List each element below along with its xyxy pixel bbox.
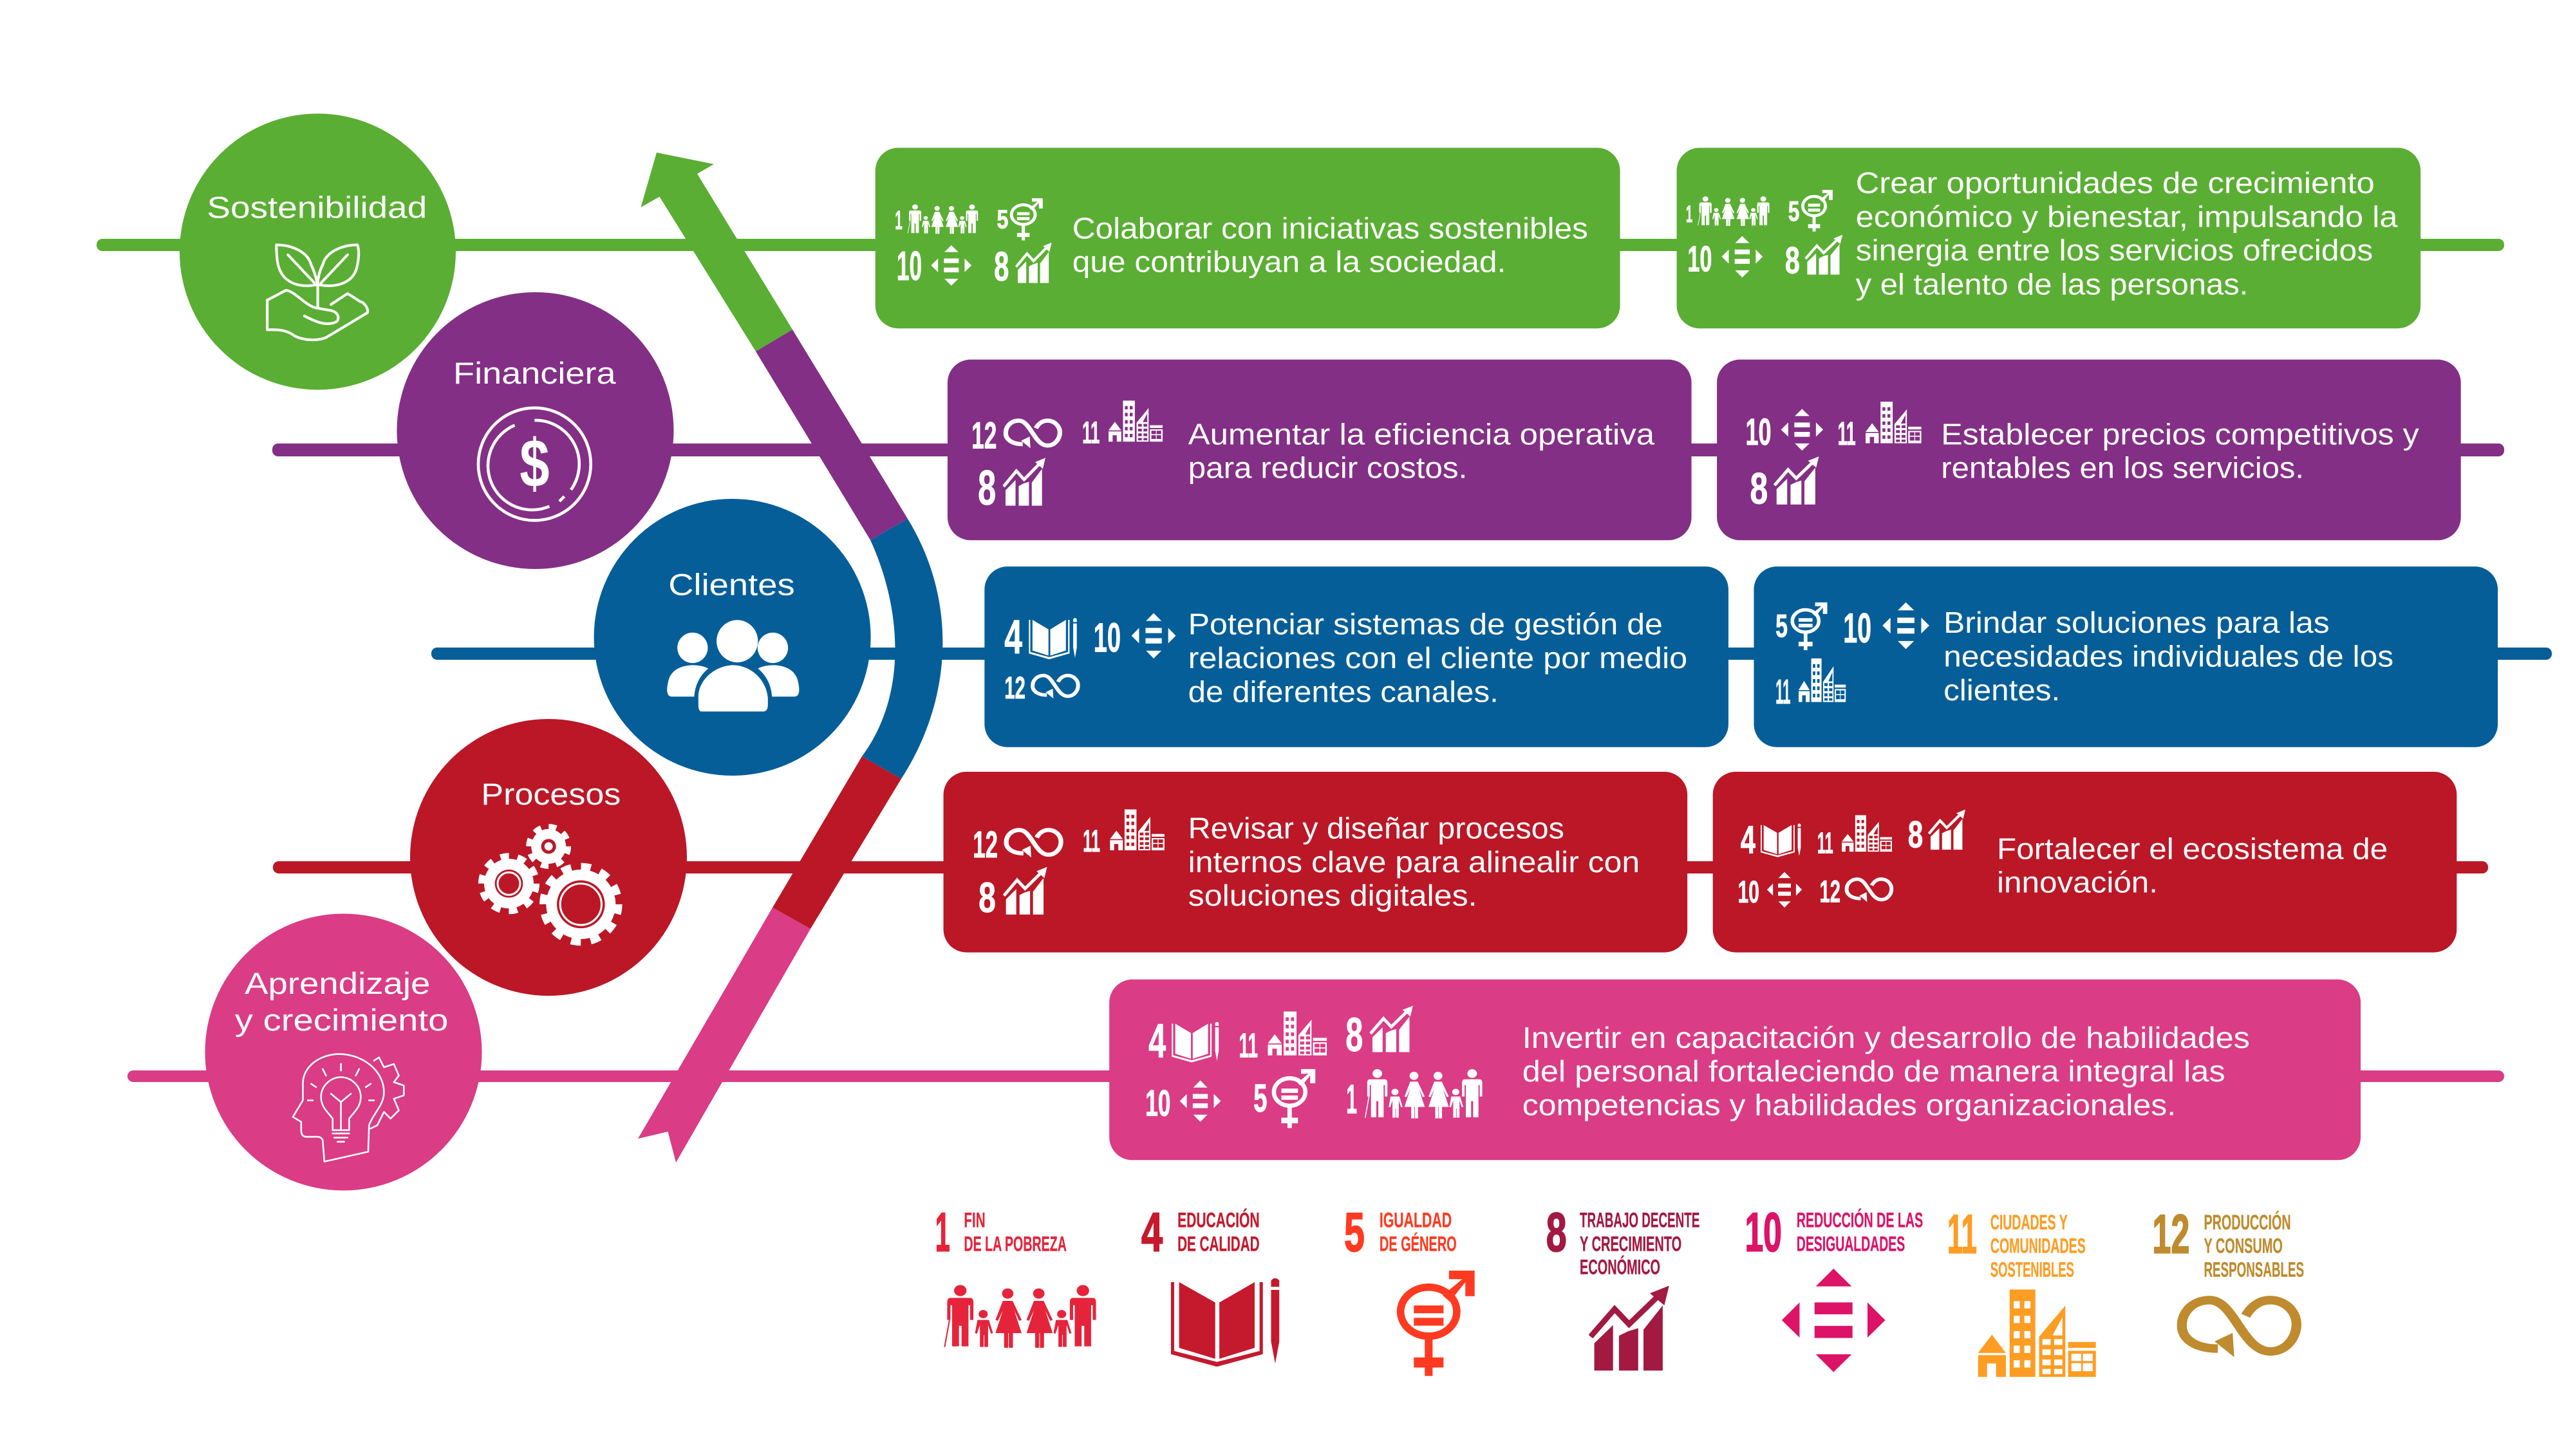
sdg icons group: 1 (1686, 201, 1692, 227)
circle label: Aprendizaje y crecimiento: Aprendizaje (245, 967, 430, 1001)
panel text: para reducir costos. (1188, 451, 1467, 485)
legend: SDG 8 (1546, 1202, 1700, 1370)
panel: sostenibilidad 2 (1677, 148, 2420, 328)
sdg icons group: 10 (1737, 875, 1759, 910)
sdg icons group (1145, 1005, 1483, 1128)
panel: financiera 1 (948, 360, 1692, 540)
sdg icons group: 10 (897, 243, 922, 289)
icon: people group (667, 620, 799, 711)
circle: Sostenibilidad (180, 113, 456, 390)
panel text: Invertir en capacitación y desarrollo de habilidades (1522, 1021, 2250, 1054)
legend: SDG 10: 10 (1745, 1202, 1782, 1263)
panel text (1856, 166, 2398, 301)
horizontal line: Sostenibilidad (97, 239, 2504, 251)
sdg icons group (1686, 190, 1842, 281)
legend: SDG 11 (1947, 1204, 2096, 1377)
panel text (1522, 1021, 2250, 1121)
panel: procesos 2 (1713, 772, 2457, 953)
icon: plant in hand (267, 245, 368, 340)
sdg icons group: 8 (979, 874, 996, 922)
icon: dollar coin: $ (520, 426, 549, 501)
sdg icons group: 8 (1750, 464, 1768, 514)
sdg icons group: 8 (1908, 814, 1923, 855)
legend: SDG 5: IGUALDAD (1380, 1208, 1452, 1232)
legend: SDG 5 (1344, 1202, 1475, 1376)
panel text: Crear oportunidades de crecimiento (1856, 166, 2375, 200)
panel text (1072, 212, 1588, 278)
circle label: Aprendizaje y crecimiento (235, 967, 448, 1038)
horizontal line: Aprendizaje (127, 1070, 2504, 1082)
legend: SDG 11: COMUNIDADES (1990, 1233, 2086, 1257)
sdg icons group: 10 (1145, 1083, 1170, 1124)
circle: Aprendizaje y crecimiento (205, 914, 482, 1191)
panel text: Colaborar con iniciativas sostenibles (1072, 212, 1588, 245)
circle label: Aprendizaje y crecimiento: y crecimiento (235, 1003, 448, 1038)
panel text: que contribuyan a la sociedad. (1072, 245, 1506, 278)
sdg icons group (1745, 402, 1922, 514)
panel text: Fortalecer el ecosistema de (1997, 832, 2388, 866)
panel text: competencias y habilidades organizacionales. (1522, 1088, 2176, 1121)
panel text: económico y bienestar, impulsando la (1856, 200, 2398, 234)
panel: clientes 1 (984, 566, 1728, 747)
legend: SDG 5: 5 (1344, 1202, 1365, 1263)
sdg icons group: 8 (1785, 239, 1800, 281)
legend: SDG 5: DE GÉNERO (1380, 1231, 1457, 1255)
sdg icons group: 11 (1838, 415, 1856, 452)
panel text: del personal fortaleciendo de manera integral las (1522, 1054, 2225, 1088)
arrow: strategic progression, multicolour (638, 153, 942, 1162)
panel text: rentables en los servicios. (1941, 451, 2304, 485)
sdg icons group: 5 (1788, 196, 1799, 227)
panel text: Brindar soluciones para las (1943, 606, 2330, 639)
legend: SDG 11: SOSTENIBLES (1990, 1258, 2074, 1282)
panel text: relaciones con el cliente por medio (1188, 641, 1687, 675)
icon: dollar coin (478, 408, 591, 520)
legend: SDG 12 (2152, 1204, 2304, 1357)
horizontal line: Procesos (273, 861, 2488, 873)
sdg icons group: 5 (1253, 1076, 1268, 1120)
panel text: Revisar y diseñar procesos (1188, 812, 1564, 845)
sdg icons group: 11 (1083, 824, 1100, 859)
legend: SDG 12: RESPONSABLES (2204, 1258, 2304, 1282)
legend: SDG 11: 11 (1947, 1204, 1977, 1265)
circle label: Sostenibilidad: Sostenibilidad (207, 191, 427, 225)
sdg icons group (971, 400, 1163, 516)
legend: SDG 4: EDUCACIÓN (1177, 1208, 1260, 1232)
sdg icons group (1737, 810, 1965, 910)
panel text (1188, 608, 1687, 709)
sdg icons group: 11 (1239, 1027, 1258, 1065)
sdg icons group: 10 (1687, 239, 1712, 279)
legend: SDG 8: Y CRECIMIENTO (1580, 1231, 1681, 1255)
icon: head with lightbulb and gear (293, 1054, 404, 1162)
legend: SDG 12: PRODUCCIÓN (2204, 1210, 2291, 1234)
legend: SDG 8: 8 (1546, 1202, 1567, 1263)
panel: procesos 1 (944, 772, 1687, 953)
panel text: innovación. (1997, 866, 2158, 899)
panel: clientes 2 (1754, 566, 2498, 747)
panel text: Potenciar sistemas de gestión de (1188, 608, 1663, 641)
sdg icons group: 1 (895, 205, 903, 235)
legend: SDG 10: DESIGUALDADES (1797, 1231, 1905, 1255)
legend: SDG 1 (935, 1202, 1096, 1348)
panel text: de diferentes canales. (1188, 675, 1499, 709)
sdg icons group: 4 (1148, 1014, 1166, 1068)
legend: SDG 1: DE LA POBREZA (964, 1231, 1067, 1255)
circle: Clientes (594, 499, 871, 776)
panel text (1997, 832, 2388, 899)
horizontal line: Clientes (431, 648, 2552, 660)
panel text: internos clave para alinealir con (1188, 845, 1640, 879)
legend: SDG 1: 1 (935, 1202, 950, 1263)
legend: SDG 4: 4 (1141, 1202, 1163, 1263)
sdg icons group (973, 809, 1165, 922)
sdg icons group: 12 (1820, 874, 1840, 909)
sdg icons group: 4 (1004, 610, 1022, 664)
sdg icons group: 1 (1346, 1076, 1357, 1122)
legend: SDG 4: DE CALIDAD (1177, 1231, 1260, 1255)
panel text: Establecer precios competitivos y (1941, 417, 2419, 451)
legend: SDG 8: ECONÓMICO (1580, 1255, 1660, 1279)
sdg icons group: 12 (973, 824, 998, 866)
panel: financiera 2 (1717, 360, 2461, 540)
sdg icons group (1775, 602, 1929, 711)
panel text: necesidades individuales de los (1943, 640, 2393, 673)
horizontal line: Financiera (272, 443, 2504, 456)
circle: Procesos (410, 719, 687, 996)
sdg icons group: 10 (1094, 615, 1121, 661)
sdg icons group: 10 (1745, 411, 1772, 453)
sdg icons group (895, 198, 1052, 290)
sdg icons group (1004, 610, 1176, 705)
legend: SDG 1: FIN (964, 1208, 986, 1232)
circle: Financiera (397, 292, 673, 569)
circle label: Financiera: Financiera (453, 357, 616, 391)
sdg icons group: 11 (1082, 416, 1100, 451)
circle label: Procesos: Procesos (481, 778, 621, 812)
panel: sostenibilidad 1 (876, 148, 1620, 328)
legend: SDG 12: Y CONSUMO (2204, 1233, 2283, 1257)
legend: SDG 4 (1141, 1202, 1279, 1367)
panel text: y el talento de las personas. (1856, 268, 2248, 301)
sdg icons group: 8 (994, 243, 1009, 290)
panel text: soluciones digitales. (1188, 879, 1477, 912)
sdg icons group: 4 (1741, 817, 1756, 861)
sdg icons group: 5 (997, 205, 1008, 234)
panel text (1188, 417, 1655, 485)
panel text (1941, 417, 2419, 485)
sdg icons group: 10 (1843, 604, 1871, 651)
sdg icons group: 11 (1775, 673, 1790, 711)
icon: gears (482, 826, 618, 942)
sdg icons group: 11 (1817, 826, 1833, 859)
sdg icons group: 8 (978, 461, 996, 516)
circle label: Clientes: Clientes (668, 568, 795, 602)
circle icons layer (267, 245, 799, 1162)
sdg icons group: 12 (971, 415, 997, 457)
sdg icons group: 12 (1004, 671, 1025, 705)
legend: SDG 8: TRABAJO DECENTE (1580, 1208, 1700, 1232)
legend: SDG 10: REDUCCIÓN DE LAS (1797, 1208, 1923, 1232)
legend: SDG 11: CIUDADES Y (1990, 1210, 2068, 1234)
panel text: Aumentar la eficiencia operativa (1188, 417, 1655, 451)
legend: SDG 10 (1745, 1202, 1923, 1372)
panel text: clientes. (1943, 673, 2060, 707)
panel text (1188, 812, 1640, 912)
panel text: sinergia entre los servicios ofrecidos (1856, 234, 2373, 267)
panel text (1943, 606, 2393, 707)
sdg icons group: 5 (1775, 608, 1788, 644)
sdg icons group: 8 (1345, 1008, 1363, 1061)
legend: SDG 12: 12 (2152, 1204, 2190, 1265)
panel: aprendizaje y crecimiento (1109, 980, 2361, 1160)
